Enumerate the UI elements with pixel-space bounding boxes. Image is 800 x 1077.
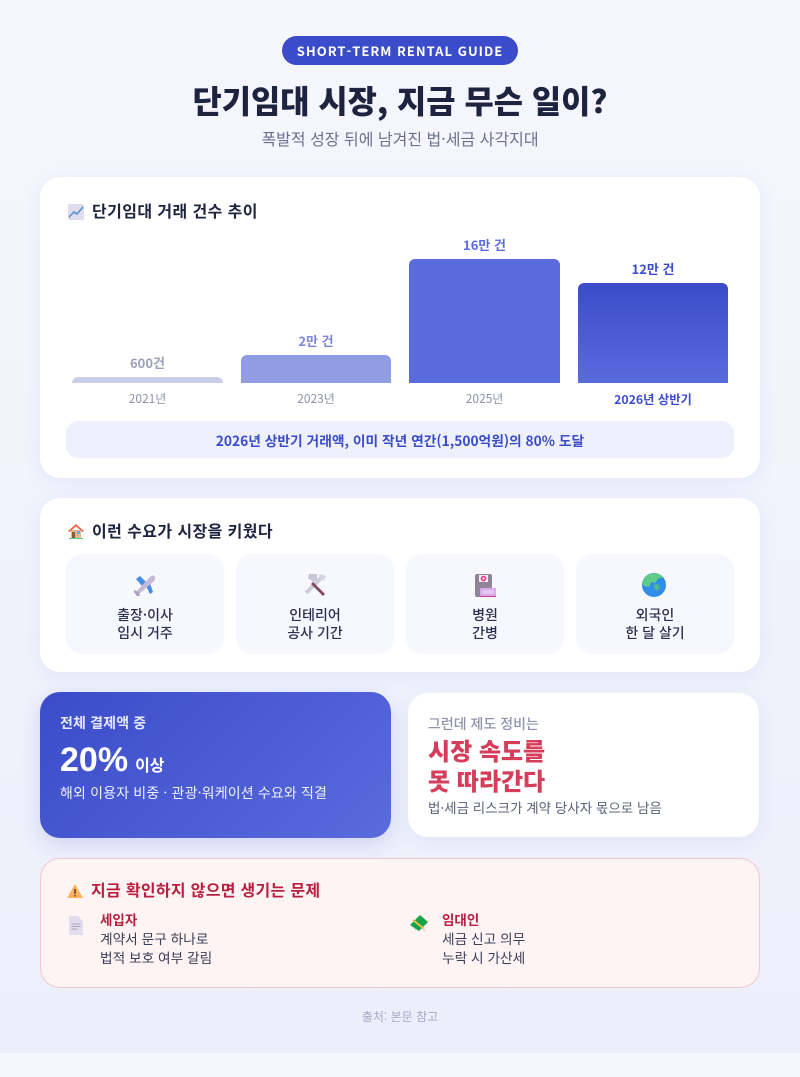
icon: document (69, 916, 83, 935)
bar: 2026 (578, 283, 728, 383)
panel: warning (40, 858, 760, 988)
icon: money (410, 915, 428, 932)
icon: hospital (475, 574, 496, 597)
tile: foreigners (576, 554, 734, 654)
label: tenant: 세입자 (100, 909, 137, 929)
badge (282, 36, 518, 65)
stat: 20 percent: 20% 이상 (60, 741, 165, 779)
heading: demand: 이런 수요가 시장을 키웠다 (92, 518, 273, 542)
heading: warning: 지금 확인하지 않으면 생기는 문제 (91, 877, 320, 901)
text: tenant risk (100, 928, 212, 967)
text: landlord risk: 누락 시 가산세 (442, 947, 525, 967)
bar: 2021 (72, 377, 223, 383)
label: business and moving: 출장·이사 (117, 605, 173, 625)
axis label: 2026: 2026년 상반기 (614, 390, 692, 408)
icon: airplane (134, 576, 155, 596)
value: 2021: 600건 (130, 353, 165, 372)
text: regulation intro: 그런데 제도 정비는 (428, 714, 539, 734)
tile: hospital (406, 554, 564, 654)
axis label: 2021: 2021년 (129, 390, 166, 407)
headline: cannot keep up: 시장 속도를 (428, 732, 545, 767)
tenant item (69, 909, 212, 967)
label: interior: 인테리어 (289, 605, 341, 625)
text: legal tax risk: 법·세금 리스크가 계약 당사자 몫으로 남음 (428, 797, 662, 817)
text: tenant risk: 법적 보호 여부 갈림 (100, 947, 212, 967)
panel: transaction trend (40, 177, 760, 478)
label: foreigners: 외국인 (636, 605, 674, 625)
icon: warning (67, 884, 83, 898)
tile: interior (236, 554, 394, 654)
tile: business and moving (66, 554, 224, 654)
icon: house (68, 524, 84, 539)
panel: demand (40, 498, 760, 672)
bar: 2023 (241, 355, 391, 383)
icon: chart (68, 204, 84, 220)
badge: SHORT-TERM RENTAL GUIDE (297, 41, 503, 60)
panel: overseas share (40, 692, 391, 838)
label: foreigners (625, 605, 685, 643)
landlord item (410, 909, 525, 967)
callout: 80 percent (66, 421, 734, 458)
value: 2026: 12만 건 (632, 259, 674, 278)
source: 출처: 본문 참고 (362, 1008, 438, 1025)
bar: 2025 (409, 259, 560, 383)
icon: tools (304, 574, 326, 596)
callout: 80 percent: 2026년 상반기 거래액, 이미 작년 연간(1,500억원)의 80% 도달 (216, 430, 584, 450)
heading: trend: 단기임대 거래 건수 추이 (92, 198, 258, 222)
text: landlord risk (442, 928, 525, 967)
headline: cannot keep up: 못 따라간다 (428, 762, 545, 797)
subtitle: 폭발적 성장 뒤에 남겨진 법·세금 사각지대 (261, 126, 539, 150)
value: 2023: 2만 건 (298, 331, 334, 350)
text: landlord risk: 세금 신고 의무 (442, 928, 525, 948)
axis label: 2023: 2023년 (297, 390, 335, 407)
value: 2025: 16만 건 (463, 235, 506, 254)
text: tenant risk: 계약서 문구 하나로 (100, 928, 208, 948)
text: overseas users: 해외 이용자 비중 · 관광·워케이션 수요와 직결 (60, 783, 327, 803)
label: interior (287, 605, 343, 643)
label: foreigners: 한 달 살기 (625, 623, 685, 643)
label: hospital: 병원 (472, 605, 498, 625)
bar chart (72, 235, 728, 408)
title: 단기임대 시장, 지금 무슨 일이? (192, 77, 607, 123)
icon: globe (642, 573, 666, 597)
label: hospital: 간병 (472, 623, 498, 643)
axis label: 2025: 2025년 (466, 390, 503, 407)
headline: cannot keep up (428, 732, 545, 797)
panel: regulation gap (408, 693, 759, 837)
label: interior: 공사 기간 (287, 623, 343, 643)
label: business and moving: 임시 거주 (117, 623, 173, 643)
label: hospital (472, 605, 498, 643)
text: overall payments: 전체 결제액 중 (60, 713, 146, 733)
label: business and moving (117, 605, 173, 643)
label: landlord: 임대인 (442, 909, 479, 929)
